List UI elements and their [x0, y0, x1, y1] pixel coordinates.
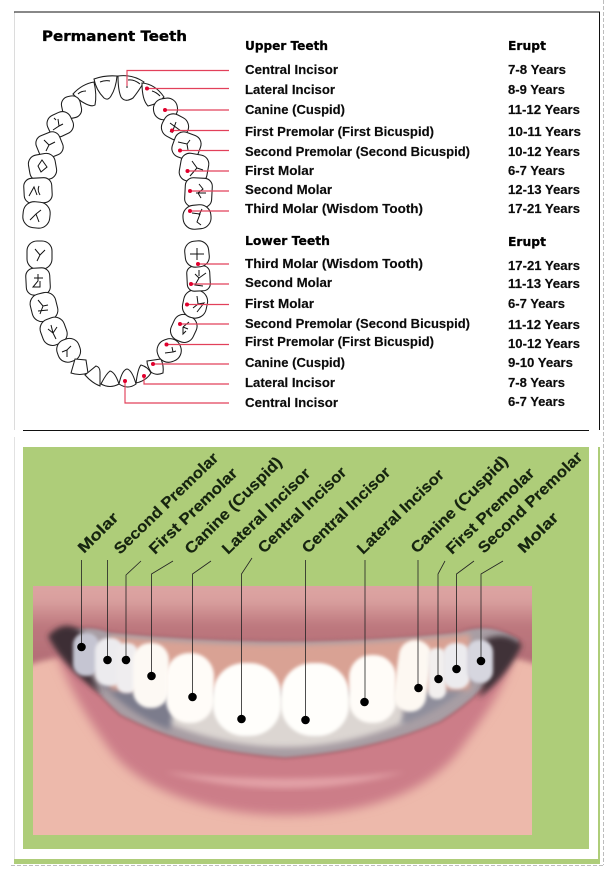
table: lower teeth names: Second Molar — [245, 276, 332, 290]
table: lower teeth names: Central Incisor — [245, 396, 338, 410]
table: lower teeth names: First Premolar (First Bicuspid) — [245, 335, 434, 349]
table: upper teeth eruption ages: 10-12 Years — [508, 145, 580, 159]
table: lower teeth eruption ages: 6-7 Years — [508, 395, 565, 409]
table: lower teeth names: Lower Teeth — [245, 233, 330, 248]
rotated tooth labels: First Premolar — [146, 465, 241, 558]
rotated tooth labels: Canine (Cuspid) — [408, 453, 512, 557]
table: upper teeth eruption ages: 7-8 Years — [508, 63, 566, 77]
table: lower teeth eruption ages — [508, 234, 580, 409]
table: upper teeth names: Second Premolar (Second Bicuspid) — [245, 145, 470, 159]
table: lower teeth eruption ages: 9-10 Years — [508, 356, 573, 370]
table: upper teeth names: Upper Teeth — [245, 38, 328, 53]
callout lines: lower teeth — [123, 262, 229, 403]
table: lower teeth names: Second Premolar (Second Bicuspid) — [245, 317, 470, 331]
table: upper teeth names: Canine (Cuspid) — [245, 103, 345, 117]
table: upper teeth names: First Molar — [245, 164, 314, 178]
rotated tooth labels — [75, 449, 586, 558]
rotated tooth labels: Central Incisor — [255, 464, 350, 557]
table: lower teeth eruption ages: 7-8 Years — [508, 376, 565, 390]
table: lower teeth names: First Molar — [245, 297, 314, 311]
rotated tooth labels: First Premolar — [443, 465, 538, 558]
rotated tooth labels: Molar — [515, 509, 562, 557]
table: lower teeth eruption ages: 11-12 Years — [508, 318, 580, 332]
table: upper teeth eruption ages — [508, 38, 581, 216]
table: upper teeth eruption ages: Erupt — [508, 38, 546, 53]
rotated tooth labels: Second Premolar — [475, 449, 586, 557]
panel: green smile diagram background — [23, 447, 589, 849]
table: lower teeth names: Lateral Incisor — [245, 376, 335, 390]
rotated tooth labels: Central Incisor — [299, 464, 394, 557]
photo: smiling mouth — [33, 586, 532, 835]
rotated tooth labels: Lateral Incisor — [354, 466, 448, 558]
diagram: upper dental arch — [22, 76, 213, 230]
rotated tooth labels: Second Premolar — [111, 450, 222, 558]
leader lines and markers on teeth — [77, 558, 503, 724]
rotated tooth labels: Lateral Incisor — [219, 465, 314, 558]
table: lower teeth eruption ages: 10-12 Years — [508, 337, 580, 351]
table: upper teeth eruption ages: 11-12 Years — [508, 103, 580, 117]
table: upper teeth names: Second Molar — [245, 183, 332, 197]
table: upper teeth names: Central Incisor — [245, 63, 338, 77]
table: upper teeth eruption ages: 12-13 Years — [508, 183, 580, 197]
table: upper teeth eruption ages: 8-9 Years — [508, 83, 565, 97]
table: lower teeth names — [245, 233, 470, 410]
callout lines: upper teeth — [127, 70, 229, 213]
table: lower teeth eruption ages: 11-13 Years — [508, 277, 580, 291]
table: lower teeth names: Third Molar (Wisdom Tooth) — [245, 257, 423, 271]
rotated tooth labels: Molar — [75, 509, 122, 557]
table: lower teeth eruption ages: Erupt — [508, 234, 546, 249]
table: lower teeth names: Canine (Cuspid) — [245, 356, 345, 370]
table: upper teeth eruption ages: 10-11 Years — [508, 125, 581, 139]
table: upper teeth names: First Premolar (First Bicuspid) — [245, 125, 434, 139]
table: upper teeth names: Third Molar (Wisdom Tooth) — [245, 202, 423, 216]
title: Permanent Teeth — [42, 29, 187, 45]
table: upper teeth names: Lateral Incisor — [245, 83, 335, 97]
rotated tooth labels: Canine (Cuspid) — [182, 454, 286, 558]
table: upper teeth names — [245, 38, 470, 216]
table: lower teeth eruption ages: 6-7 Years — [508, 297, 565, 311]
table: upper teeth eruption ages: 6-7 Years — [508, 164, 565, 178]
table: upper teeth eruption ages: 17-21 Years — [508, 202, 580, 216]
panel: permanent teeth chart — [14, 12, 600, 431]
diagram: lower dental arch — [25, 240, 211, 387]
table: lower teeth eruption ages: 17-21 Years — [508, 259, 580, 273]
